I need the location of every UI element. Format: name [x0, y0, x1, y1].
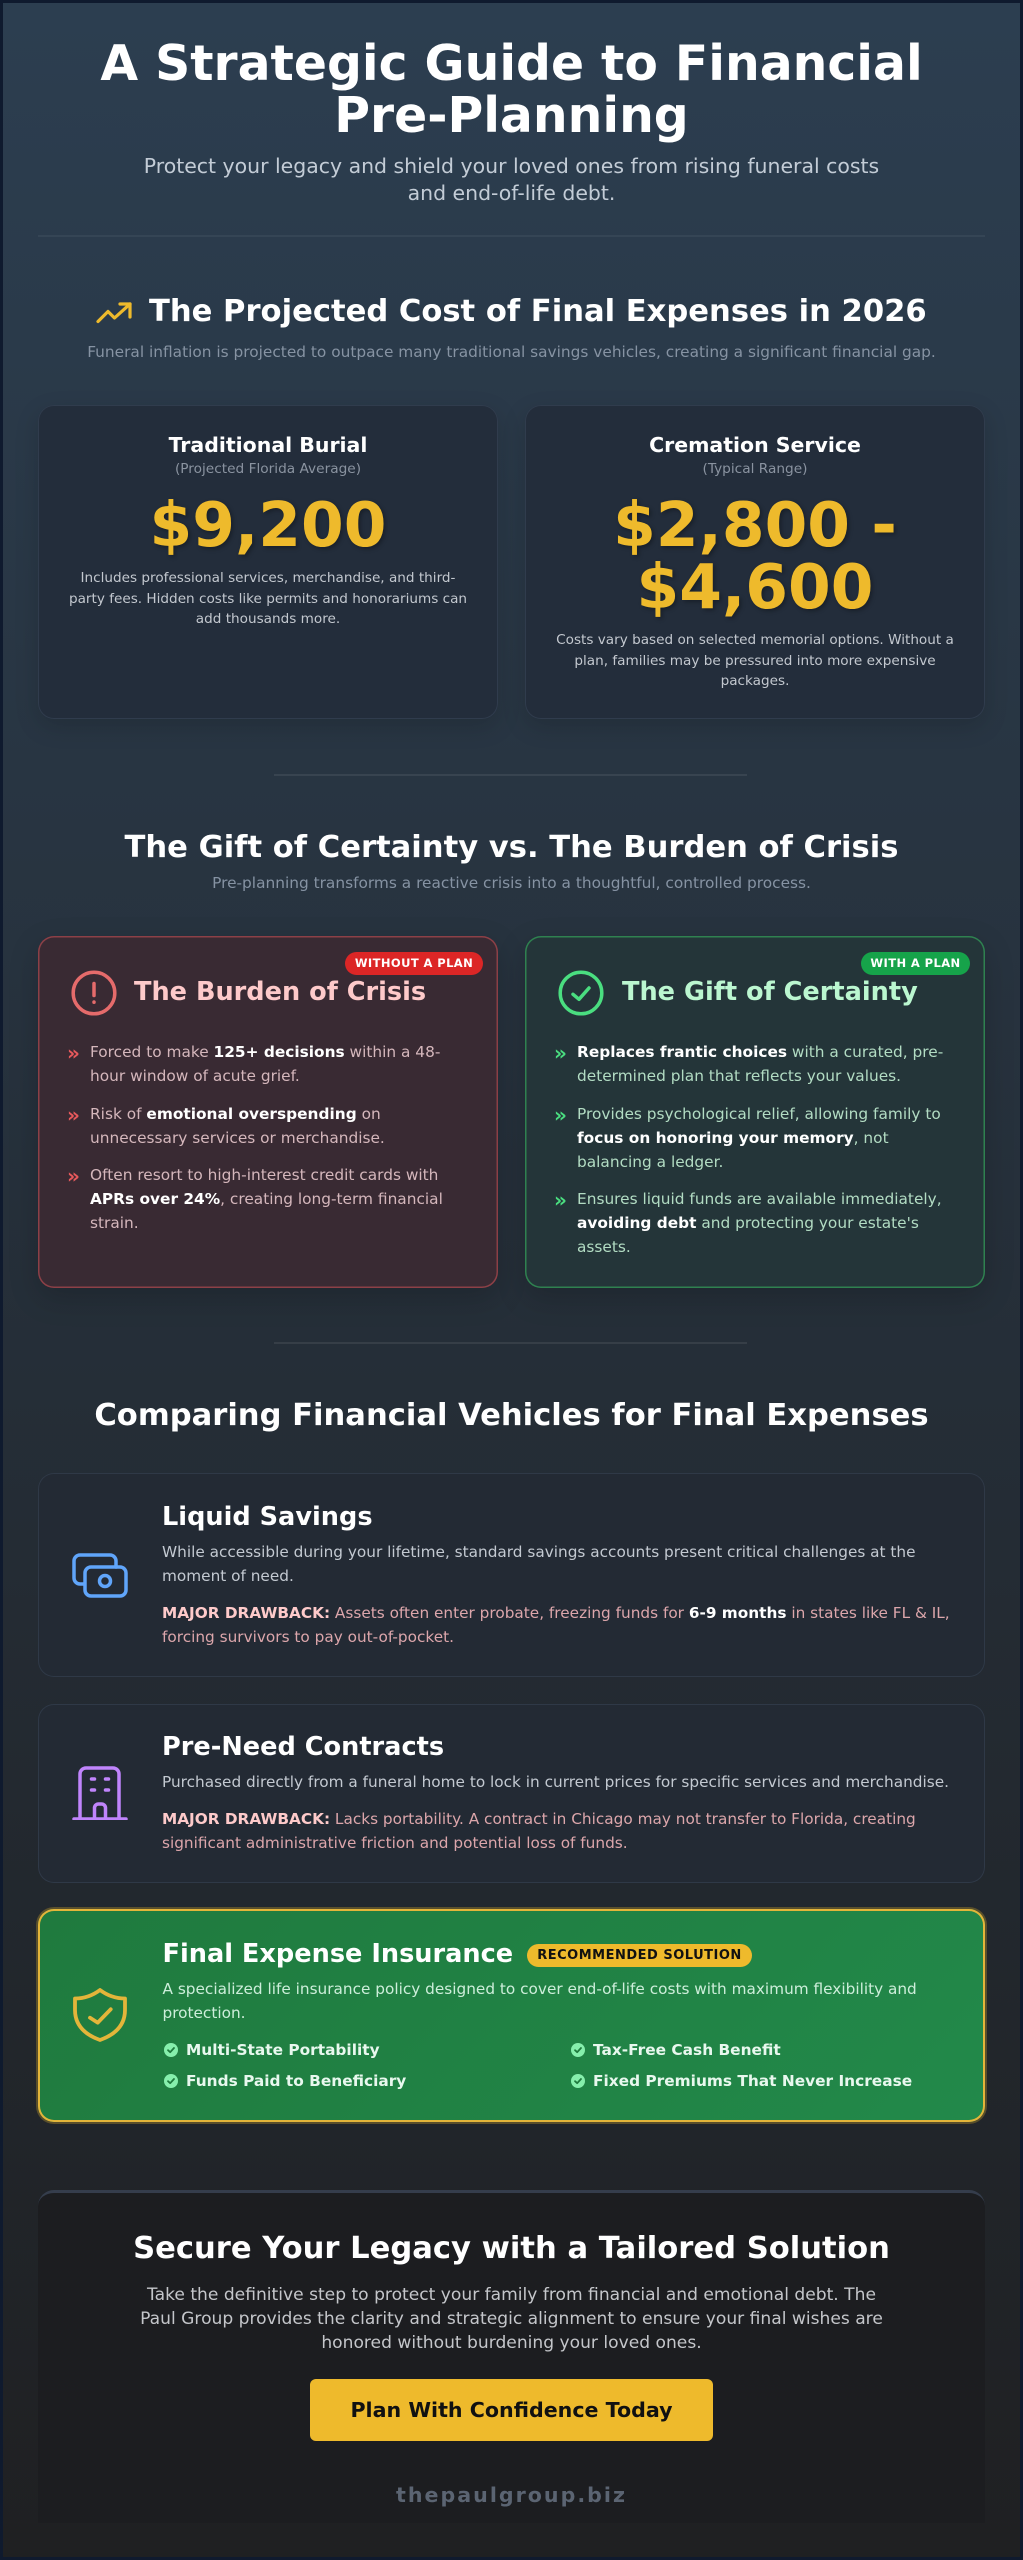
- title: A Strategic Guide to Financial: [100, 35, 923, 92]
- badge: recommended solution: [527, 1944, 752, 1967]
- list item: [67, 1041, 440, 1085]
- card description: packages.: [721, 673, 789, 689]
- card title: Cremation Service: [649, 433, 861, 457]
- badge: recommended solution: RECOMMENDED SOLUTION: [537, 1948, 742, 1963]
- price range: $4,600: [637, 552, 873, 623]
- heading: Secure Your Legacy with a Tailored Solution: [133, 2231, 890, 2266]
- panel: traditional burial: [38, 405, 498, 719]
- description: Purchased directly from a funeral home to lock in current prices for specific services and merchandise.: [162, 1773, 949, 1791]
- badge: without a plan: [345, 952, 483, 975]
- list item: Replaces frantic choices with a curated, pre-: [577, 1043, 943, 1061]
- heading: Liquid Savings: [162, 1502, 373, 1532]
- icon: shield check: [73, 1988, 127, 2042]
- list item: assets.: [577, 1238, 631, 1256]
- list item: avoiding debt and protecting your estate's: [577, 1214, 919, 1232]
- list item: »: [67, 1164, 80, 1188]
- drawback: [162, 1604, 950, 1646]
- card description: Includes professional services, merchandise, and third-: [81, 570, 455, 586]
- list item: [554, 1103, 941, 1171]
- paragraph: Take the definitive step to protect your family from financial and emotional debt. The: [147, 2285, 876, 2305]
- list item: Ensures liquid funds are available immediately,: [577, 1190, 942, 1208]
- panel: final expense insurance: [38, 1909, 985, 2122]
- section heading: gift vs burden: The Gift of Certainty vs. The Burden of Crisis: [125, 830, 898, 865]
- card description: Costs vary based on selected memorial options. Without a: [556, 632, 954, 648]
- subtitle: Protect your legacy and shield your loved ones from rising funeral costs: [144, 154, 879, 178]
- panel: gift of certainty: [525, 936, 985, 1288]
- card description: add thousands more.: [196, 611, 340, 627]
- section subtitle: Funeral inflation is projected to outpace many traditional savings vehicles, creating a significant financial gap.: [87, 343, 936, 361]
- panel: pre-need contracts: [38, 1704, 985, 1883]
- description: [162, 1980, 917, 2022]
- panel: call to action: [38, 2190, 985, 2523]
- list item: balancing a ledger.: [577, 1153, 723, 1171]
- card description: party fees. Hidden costs like permits and honorariums can: [69, 590, 467, 606]
- button: Plan With Confidence Today: [350, 2398, 673, 2422]
- list item: APRs over 24%, creating long-term financial: [90, 1190, 443, 1208]
- paragraph: Paul Group provides the clarity and strategic alignment to ensure your final wishes are: [140, 2309, 883, 2329]
- description: A specialized life insurance policy designed to cover end-of-life costs with maximum flexibility and: [162, 1980, 917, 1998]
- panel heading: The Gift of Certainty: [622, 977, 918, 1007]
- price: $9,200: [150, 490, 386, 561]
- description: moment of need.: [162, 1567, 294, 1585]
- list item: »: [554, 1103, 567, 1127]
- badge: with a plan: WITH A PLAN: [870, 956, 961, 970]
- list item: Often resort to high-interest credit cards with: [90, 1166, 438, 1184]
- list item: Provides psychological relief, allowing family to: [577, 1105, 941, 1123]
- list item: [67, 1164, 443, 1232]
- subtitle: and end-of-life debt.: [408, 181, 615, 205]
- price range: [613, 490, 897, 623]
- title: [100, 35, 923, 144]
- list item: strain.: [90, 1214, 139, 1232]
- description: protection.: [162, 2004, 246, 2022]
- feature: beneficiary: Funds Paid to Beneficiary: [186, 2072, 406, 2090]
- icon: trending up arrow: [96, 302, 132, 324]
- price range: $2,800 -: [613, 490, 897, 561]
- card title: Traditional Burial: [169, 433, 367, 457]
- subtitle: [144, 154, 879, 205]
- drawback: [162, 1810, 916, 1852]
- panel: burden of crisis: [38, 936, 498, 1288]
- list item: »: [554, 1188, 567, 1212]
- list item: »: [67, 1041, 80, 1065]
- list item: determined plan that reflects your values.: [577, 1067, 901, 1085]
- list item: hour window of acute grief.: [90, 1067, 300, 1085]
- panel: liquid savings: [38, 1473, 985, 1677]
- list item: Risk of emotional overspending on: [90, 1105, 381, 1123]
- section heading: projected cost: [96, 294, 927, 329]
- panel: cremation service: [525, 405, 985, 719]
- list item: [67, 1103, 385, 1147]
- drawback: MAJOR DRAWBACK: Lacks portability. A contract in Chicago may not transfer to Florida, creating: [162, 1810, 916, 1828]
- title: Pre-Planning: [334, 87, 689, 144]
- section subtitle: Pre-planning transforms a reactive crisis into a thoughtful, controlled process.: [212, 874, 811, 892]
- heading text: The Projected Cost of Final Expenses in 2026: [149, 294, 927, 329]
- heading: Pre-Need Contracts: [162, 1732, 444, 1762]
- paragraph: honored without burdening your loved ones.: [321, 2333, 702, 2353]
- button: [310, 2379, 713, 2441]
- website: thepaulgroup.biz: [396, 2483, 627, 2507]
- list item: »: [67, 1103, 80, 1127]
- card description: [556, 632, 954, 689]
- icon: building: [72, 1766, 128, 1820]
- list item: »: [554, 1041, 567, 1065]
- icon: alert circle: [71, 970, 117, 1016]
- heading: Final Expense Insurance: [162, 1939, 513, 1969]
- feature: portability: Multi-State Portability: [186, 2041, 380, 2059]
- badge: with a plan: [861, 952, 970, 975]
- panel heading: The Burden of Crisis: [134, 977, 426, 1007]
- feature: fixed premiums: Fixed Premiums That Never Increase: [593, 2072, 912, 2090]
- list item: [554, 1188, 942, 1256]
- icon: money: [72, 1553, 128, 1598]
- drawback: forcing survivors to pay out-of-pocket.: [162, 1628, 454, 1646]
- badge: without a plan: WITHOUT A PLAN: [355, 956, 473, 970]
- list item: [554, 1041, 943, 1085]
- list item: focus on honoring your memory, not: [577, 1129, 889, 1147]
- card subtitle: (Projected Florida Average): [175, 461, 361, 477]
- section heading: comparing vehicles: Comparing Financial Vehicles for Final Expenses: [94, 1398, 929, 1433]
- card subtitle: (Typical Range): [703, 461, 807, 477]
- card description: plan, families may be pressured into more expensive: [574, 652, 936, 668]
- paragraph: [140, 2285, 883, 2353]
- description: [162, 1543, 916, 1585]
- list item: unnecessary services or merchandise.: [90, 1129, 385, 1147]
- icon: check circle: [558, 970, 604, 1016]
- description: While accessible during your lifetime, standard savings accounts present critical challenges at the: [162, 1543, 916, 1561]
- list item: Forced to make 125+ decisions within a 48-: [90, 1043, 440, 1061]
- feature: tax free: Tax-Free Cash Benefit: [593, 2041, 781, 2059]
- drawback: significant administrative friction and potential loss of funds.: [162, 1834, 628, 1852]
- card description: [69, 570, 467, 627]
- drawback: MAJOR DRAWBACK: Assets often enter probate, freezing funds for 6-9 months in states like FL & IL,: [162, 1604, 950, 1622]
